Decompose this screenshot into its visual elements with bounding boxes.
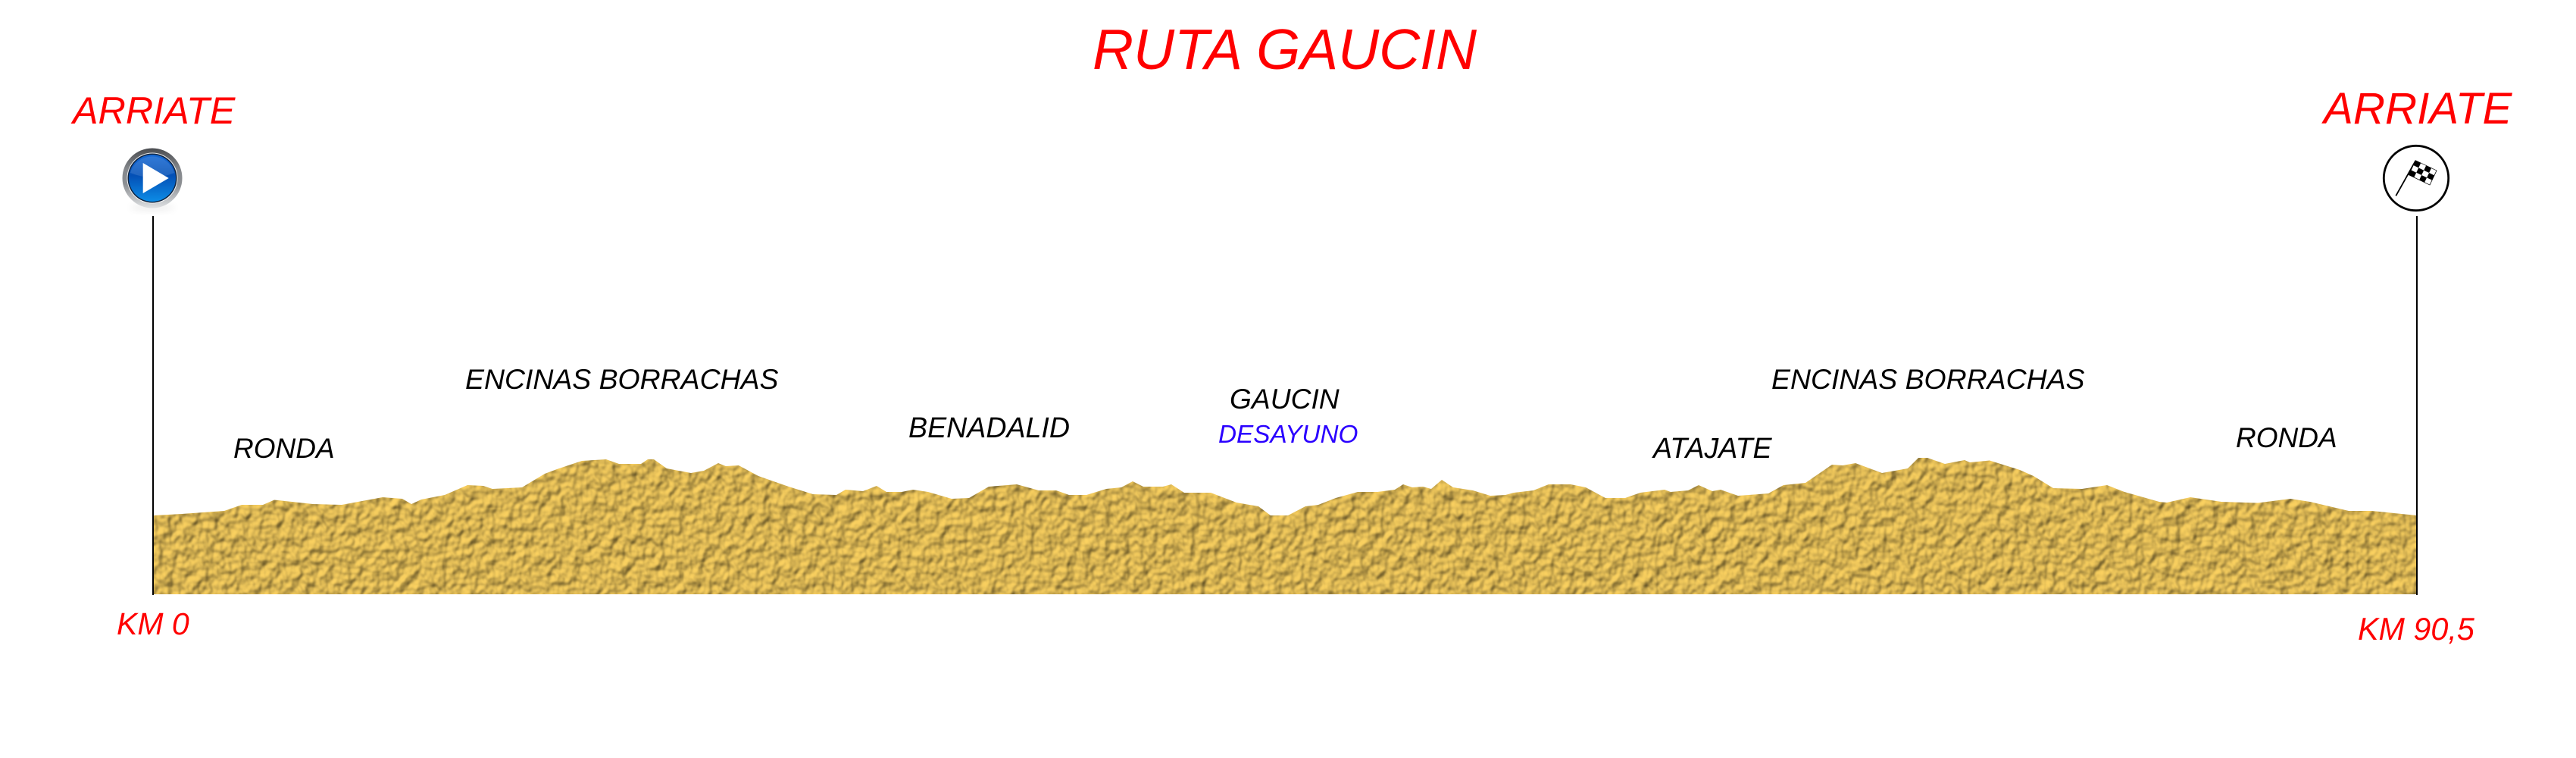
place label: Ronda outbound: RONDA <box>233 433 335 464</box>
icon: finish checkered flag <box>2384 146 2449 211</box>
place label: Encinas Borrachas outbound: ENCINAS BORRACHAS <box>465 363 779 395</box>
place label: Encinas Borrachas return: ENCINAS BORRACHAS <box>1771 363 2085 395</box>
place label: Atajate: ATAJATE <box>1652 432 1773 464</box>
chart: elevation terrain profile <box>152 451 2421 599</box>
title: RUTA GAUCIN <box>1093 17 1477 81</box>
stop note: breakfast: DESAYUNO <box>1218 421 1358 449</box>
finish town label: ARRIATE <box>2321 84 2512 133</box>
place label: Benadalid: BENADALID <box>908 412 1070 443</box>
start distance label: KM 0 <box>117 606 189 641</box>
place label: Gaucin: GAUCIN <box>1230 383 1340 415</box>
finish vertical marker line <box>2416 216 2418 595</box>
finish distance label: KM 90,5 <box>2358 612 2475 647</box>
start town label: ARRIATE <box>70 89 236 132</box>
place label: Ronda return: RONDA <box>2236 422 2337 453</box>
start vertical marker line <box>152 216 154 595</box>
icon: start play button <box>123 149 182 210</box>
